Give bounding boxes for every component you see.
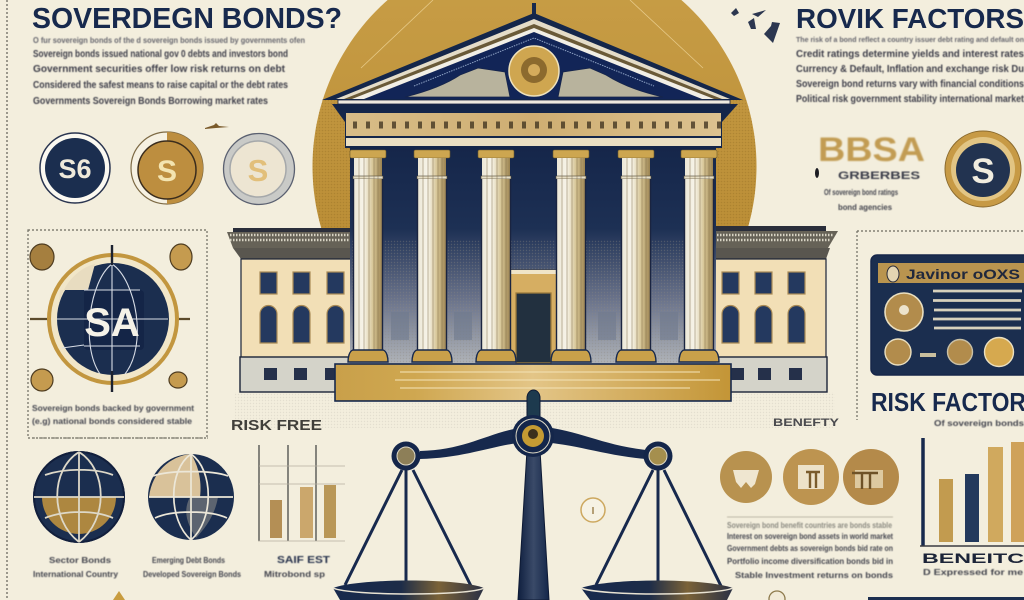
bar chart: benefits [920, 438, 1024, 546]
rating label: bond agencies [838, 202, 892, 212]
door [510, 270, 558, 363]
small gold mark bottom left [113, 591, 125, 600]
label: safest [264, 555, 330, 579]
panel: risk factor card [857, 231, 1024, 420]
icon: gold coin [131, 132, 203, 204]
right pan [581, 442, 733, 600]
icon: decorative flourish [731, 8, 780, 43]
icon: silver coin [224, 134, 294, 204]
caption: (e.g) national bonds considered stable [32, 416, 192, 426]
caption [32, 403, 194, 426]
icon: globe emblem [30, 245, 190, 392]
dark card [871, 255, 1024, 375]
caption: globe one: Sector Bonds [49, 555, 111, 565]
icon: navy coin [40, 133, 110, 203]
text block: intro [33, 36, 305, 107]
text block: intro: O fur sovereign bonds of the d sovereign bonds issued by governments ofen [33, 36, 305, 45]
relief [405, 68, 663, 97]
caption: Sovereign bonds backed by government [32, 403, 194, 413]
caption: globe two [143, 555, 241, 579]
dark footer strip [868, 597, 1024, 600]
label: risk free: RISK FREE [231, 417, 322, 434]
panel: sovereign globe [28, 230, 207, 438]
panel: risk factor card: Javinor oOXS [906, 266, 1020, 282]
small mark [205, 123, 229, 129]
caption: risk factor: Of sovereign bonds [934, 418, 1024, 428]
text block: benefits: Stable Investment returns on bonds [735, 570, 893, 580]
text block: risk intro [796, 37, 1024, 105]
caption: benefits: D Expressed for me [923, 567, 1023, 577]
icon: dollar coin right: S [971, 152, 995, 191]
caption: globe one: International Country [33, 569, 118, 579]
icon: globe emblem: SA [84, 301, 140, 345]
colonnade backing [350, 146, 716, 364]
text block: intro: Sovereign bonds issued national gov 0 debts and investors bond [33, 48, 288, 60]
entablature [332, 100, 738, 148]
columns [348, 150, 719, 362]
text block: benefits [727, 517, 893, 580]
balance scale [333, 390, 733, 600]
text block: intro: Governments Sovereign Bonds Borrowing market rates [33, 95, 268, 107]
text block: benefits: Government debts as sovereign bonds bid rate on [727, 543, 893, 553]
rating label: GRBERBES [838, 170, 920, 182]
text block: intro: Government securities offer low risk returns on debt [33, 63, 285, 75]
divider strip with tab [33, 437, 208, 439]
left wing [227, 228, 353, 392]
pillar [518, 450, 549, 600]
rating label: Of sovereign bond ratings [824, 187, 898, 197]
icon: small coins [30, 244, 192, 391]
left dotted margin [6, 0, 8, 600]
small gold coin bottom [769, 591, 785, 600]
beam [420, 426, 646, 459]
icon: three gold coins [720, 449, 899, 505]
card small coins [885, 339, 911, 365]
golden sun disc [312, 0, 757, 237]
rating label [815, 131, 925, 212]
caption: globe one [33, 555, 118, 579]
icon: gold coin: S [157, 155, 177, 188]
pediment [322, 3, 743, 100]
label: safest: SAIF EST [277, 555, 330, 566]
text block: intro: Considered the safest means to raise capital or the debt rates [33, 79, 288, 91]
text block: benefits: Interest on sovereign bond assets in world market [727, 531, 893, 541]
icon: navy coin: S6 [58, 154, 92, 184]
card coin [885, 293, 923, 331]
right wing [714, 226, 838, 392]
label: benefits: BENEITC [922, 550, 1024, 566]
icon: silver coin: S [248, 153, 268, 188]
main building [227, 3, 838, 401]
icon: globe one [33, 451, 125, 543]
rating label: BBSA [818, 131, 925, 169]
base plinth [335, 364, 731, 401]
left pan [333, 442, 484, 600]
right title: risk factors: ROVIK FACTORS [796, 3, 1024, 34]
caption: globe two: Developed Sovereign Bonds [143, 569, 241, 579]
hub [512, 415, 554, 457]
icon: dollar coin right [945, 131, 1021, 207]
text block: risk intro: The risk of a bond reflect a country issuer debt rating and default on [796, 37, 1024, 44]
label: safest: Mitrobond sp [264, 569, 325, 579]
label: benefit: BENEFTY [773, 417, 840, 429]
text block: benefits: Sovereign bond benefit countries are bonds stable [727, 520, 892, 530]
card lines [933, 291, 1022, 328]
icon: tiny gold medallion [581, 498, 605, 522]
title: sovereign bonds: SOVERDEGN BONDS? [32, 3, 342, 35]
bar chart: safety [258, 445, 345, 541]
caption: globe two: Emerging Debt Bonds [152, 555, 225, 565]
icon: globe two [148, 454, 234, 540]
halftone ground [235, 392, 835, 428]
niches [391, 312, 678, 340]
text block: benefits: Portfolio income diversification bonds bid in [727, 556, 893, 566]
